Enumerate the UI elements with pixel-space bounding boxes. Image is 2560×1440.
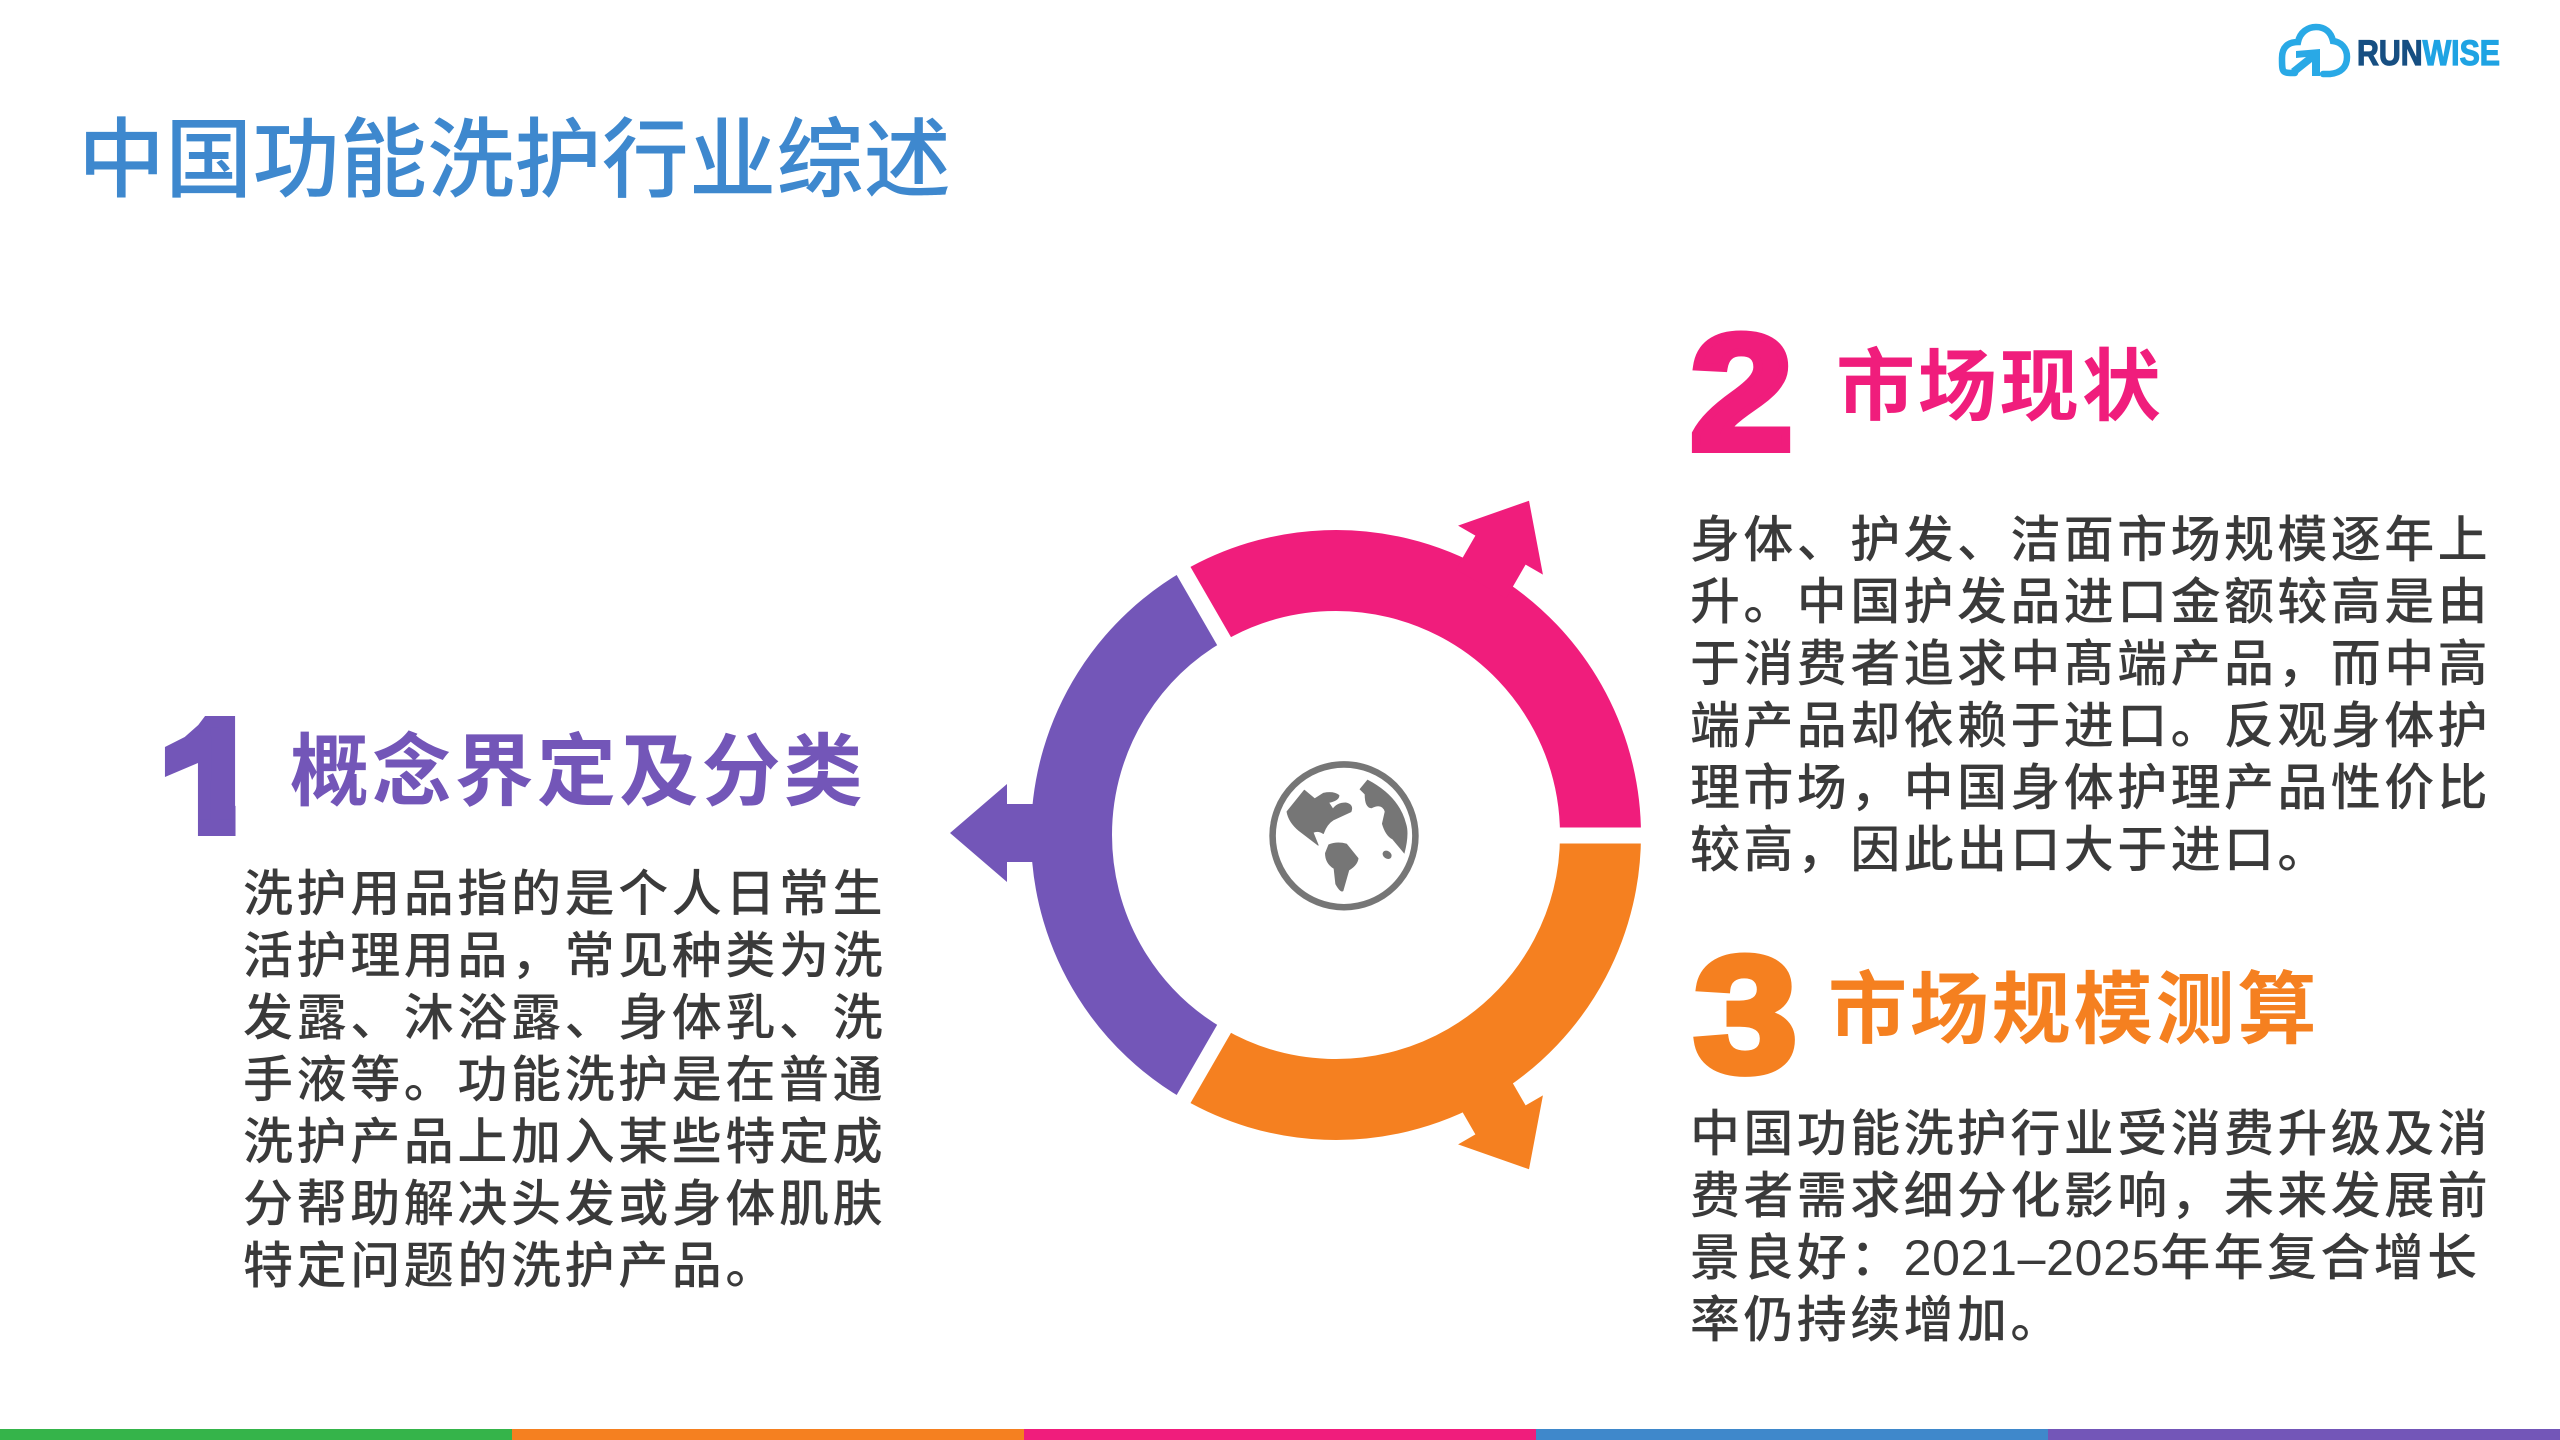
- section 2 heading: 市场现状: [1836, 342, 2164, 431]
- section 3 number: 3: [1694, 923, 1797, 1106]
- section 1 text: 特定问题的洗护产品。: [243, 1238, 779, 1294]
- logo: RUNWISE: [2278, 24, 2500, 78]
- section 1 text: 活护理用品，常见种类为洗: [243, 928, 886, 984]
- section 1 heading: 概念界定及分类: [290, 727, 866, 816]
- section 2 text: 升。中国护发品进口金额较高是由: [1690, 574, 2491, 630]
- section 3 text: [1690, 1106, 2491, 1348]
- section 3 text: 费者需求细分化影响，未来发展前: [1690, 1168, 2491, 1224]
- section 1 text: 洗护产品上加入某些特定成: [243, 1114, 886, 1170]
- section 2 number: 2: [1690, 301, 1793, 484]
- section 2 text: 理市场，中国身体护理产品性价比: [1690, 760, 2491, 816]
- bottom colour bar: [0, 1429, 2560, 1440]
- section 1 number: 1: [161, 687, 260, 863]
- section 1 text: [243, 866, 886, 1294]
- section 1 text: 发露、沐浴露、身体乳、洗: [243, 990, 886, 1046]
- title: 中国功能洗护行业综述: [78, 112, 951, 209]
- section 1 text: 分帮助解决头发或身体肌肤: [243, 1176, 886, 1232]
- arc arrow: pink: [1204, 476, 1600, 835]
- section 2 text: 身体、护发、洁面市场规模逐年上: [1690, 512, 2491, 568]
- arc arrow: purple: [950, 606, 1204, 1064]
- icon: globe: [1273, 764, 1415, 907]
- section 2 text: 较高，因此出口大于进口。: [1690, 822, 2331, 878]
- logo: RUNWISE: RUNWISE: [2357, 34, 2500, 73]
- section 2 text: [1690, 512, 2491, 878]
- section 1 text: 洗护用品指的是个人日常生: [243, 866, 886, 922]
- section 3 text: 率仍持续增加。: [1690, 1292, 2064, 1348]
- arc arrow: orange: [1204, 835, 1600, 1194]
- section 1 text: 手液等。功能洗护是在普通: [243, 1052, 886, 1108]
- circular arrow diagram: [950, 500, 1641, 1170]
- section 2 text: 端产品却依赖于进口。反观身体护: [1690, 698, 2491, 754]
- section 1 number: [164, 716, 236, 836]
- section 2 text: 于消费者追求中髙端产品，而中高: [1690, 636, 2491, 692]
- section 3 text: 景良好：2021–2025年年复合增长: [1690, 1230, 2481, 1286]
- section 3 text: 中国功能洗护行业受消费升级及消: [1690, 1106, 2491, 1162]
- section 3 heading: 市场规模测算: [1828, 965, 2319, 1054]
